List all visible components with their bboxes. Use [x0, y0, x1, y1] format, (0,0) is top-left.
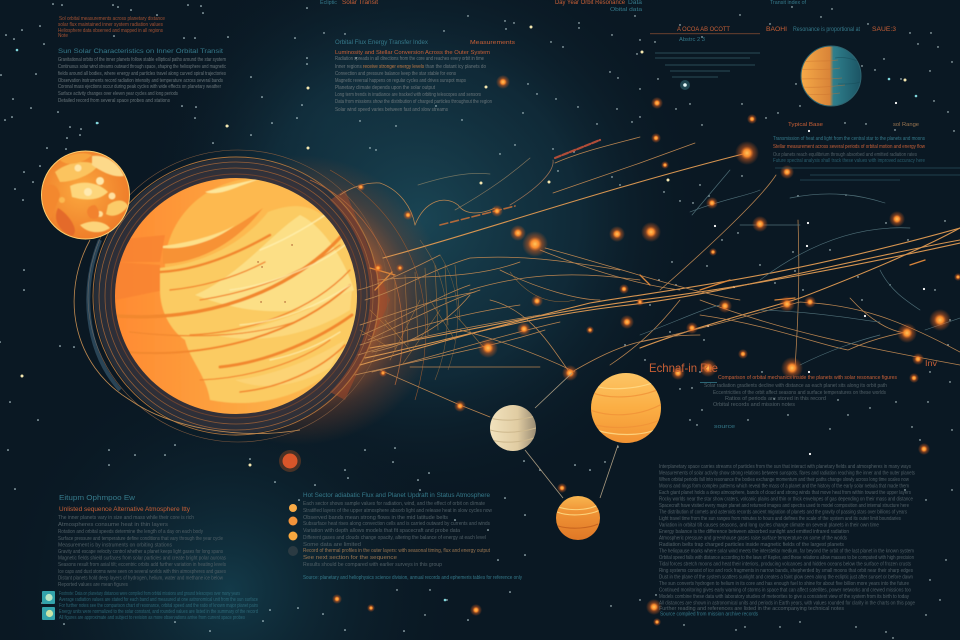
top-left text block: Observation instruments record radiation intensity and temperature across several bands	[58, 78, 223, 84]
bottom-left text block: Ice caps and dust storms were seen on several worlds with thin atmospheres and gases	[58, 569, 226, 575]
long text block bottom right: All distances are shown in astronomical units and periods in Earth years, with values rounded for clarity in the charts on this page	[659, 600, 915, 606]
top-center text block: Convection and pressure balance keep the star stable for eons	[335, 71, 456, 77]
right side text block	[773, 122, 960, 180]
large orange planet lower right	[590, 373, 662, 443]
top-right header and rules: Resonance is proportional at	[793, 26, 860, 33]
right side text block: Stellar measurement across several periods of orbital motion and energy flow	[773, 144, 925, 150]
long text block bottom right	[659, 464, 915, 618]
long text block bottom right: Models combine these data with laboratory studies of meteorites to give a consistent view of the system from its birth to today	[659, 594, 909, 600]
top-center text block: Orbital Flux Energy Transfer Index	[335, 39, 429, 46]
long text block bottom right: Measurements of solar activity show strong relations between sunspots, flares and radiation reaching the inner and the outer planets	[659, 470, 915, 476]
long text block bottom right: Interplanetary space carries streams of particles from the sun that interact with planetary fields and atmospheres in many ways	[659, 464, 911, 470]
teal footnote: All figures are approximate and subject to revision as more observations arrive from current space probes	[59, 615, 245, 621]
middle bottom text block: Observed bands mean strong flows in the mid latitude belts	[303, 515, 448, 521]
top edge labels: Transit index of	[770, 0, 807, 6]
top-left text block: Sun Solar Characteristics on Inner Orbital Transit	[58, 48, 223, 55]
orange star nodes	[332, 75, 960, 626]
top-right header and rules: A OCOA AB OCOTT	[677, 26, 730, 33]
top-right header and rules: Abstrc 2 3	[679, 37, 705, 43]
teal footnote: Average radiation values are stated for each band and measured at one astronomical unit from the sun surface	[59, 597, 258, 603]
top-left text block	[58, 16, 226, 104]
middle-right heading and text: Orbital records and mission notes	[713, 402, 795, 408]
middle bottom text block: Record of thermal profiles in the outer layers: with seasonal timing, flux and energy output	[303, 548, 490, 554]
red small planet	[279, 450, 301, 472]
top-center text block	[335, 39, 516, 113]
right side text block: Transmission of heat and light from the central star to the planets and moons	[773, 136, 925, 142]
top-left text block: Gravitational orbits of the inner planets follow stable elliptical paths around the star system	[58, 57, 226, 63]
middle bottom text block: Results should be compared with earlier surveys in this group	[303, 562, 442, 568]
top-center text block: Data from missions show the distribution of charged particles throughout the region	[335, 99, 492, 105]
right side text block: Typical Base	[788, 122, 823, 128]
top-left text block: Detailed record from several space probes and stations	[58, 98, 170, 104]
big orange planet	[111, 174, 362, 420]
long text block bottom right: Rocky worlds near the star show craters, volcanic plains and thin or thick envelopes of gas depending on their mass and distance	[659, 496, 913, 502]
top edge labels	[320, 0, 807, 13]
filament network	[340, 137, 960, 417]
middle-right heading and text: Inv	[925, 359, 937, 368]
bottom-left text block: Distant planets hold deep layers of hydrogen, helium, water and methane ice below	[58, 576, 223, 582]
long text block bottom right: Tidal forces stretch moons and heat their interiors, producing volcanoes and hidden oceans below the surface of frozen crusts	[659, 562, 911, 568]
middle-right heading and text: Comparison of orbital mechanics inside the planets with solar resonance figures	[718, 375, 897, 381]
top-center text block: Magnetic reversal happens on regular cycles and drives sunspot maps	[335, 78, 466, 84]
bottom-left text block: Gravity and escape velocity control whether a planet keeps light gases for long spans	[58, 549, 223, 555]
connecting lines to planets	[525, 373, 618, 498]
bottom-left text block: Atmospheres consume heat in thin layers	[58, 522, 168, 528]
top-right header and rules	[650, 26, 896, 77]
long text block bottom right: Energy balance is the difference between absorbed sunlight and emitted infrared radiation	[659, 529, 849, 535]
long text block bottom right: Each giant planet holds a deep atmosphere, bands of cloud and strong winds that move heat from within toward the upper layers	[659, 490, 911, 496]
right side text block: Future spectral analysis shall track these values with improved accuracy here	[773, 158, 925, 164]
bottom-left text block: The inner planets vary in size and mass while their core is rich	[58, 515, 194, 521]
long text block bottom right: Atmospheric pressure and greenhouse gases raise surface temperature on some of the worlds	[659, 536, 847, 542]
middle bottom bullets	[288, 504, 298, 556]
middle bottom text block: Different gases and clouds change opacity, altering the balance of energy at each level	[303, 535, 486, 541]
long text block bottom right: Radiation belts trap charged particles inside magnetic fields of the largest planets	[659, 542, 844, 548]
right side text block: sol Range	[893, 122, 919, 128]
small molten sun	[42, 151, 130, 239]
long text block bottom right: Spacecraft have visited every major planet and returned images and spectra used to model composition and internal structure here	[659, 503, 909, 509]
long text block bottom right: Variation in orbital tilt causes seasons, and long cycles change climate on several planets in their own time	[659, 522, 879, 528]
orange planet bottom	[556, 496, 600, 540]
teal footnote	[59, 591, 258, 621]
top-center text block: Luminosity and Stellar Conversion Across the Outer System	[335, 50, 490, 56]
middle bottom text block: Stratified layers of the upper atmosphere absorb light and release heat in slow cycles now	[303, 508, 492, 514]
middle bottom text block: Some data are limited	[303, 542, 361, 548]
top-center text block: Radiation spreads in all directions from the core and reaches every orbit in time	[335, 56, 484, 62]
long text block bottom right: Further reading and references are listed in the accompanying technical notes	[659, 606, 844, 612]
top-center text block: Solar wind speed varies between fast and slow streams	[335, 107, 448, 113]
top-center text block: Inner regions receive stronger energy levels than the distant icy planets do	[335, 64, 486, 70]
long text block bottom right: Orbital speed falls with distance according to the laws of Kepler, and these relations allow masses to be computed with high precision	[659, 555, 914, 561]
long text block bottom right: The distribution of comets and asteroids records ancient migration of planets and the gravity of passing stars over billions of years	[659, 510, 907, 516]
long text block bottom right: When orbital periods fall into resonance the bodies exchange momentum and their paths change slowly across long time scales now	[659, 477, 909, 483]
top-left text block: Sol orbital measurements across planetary distance	[59, 16, 165, 22]
teal footnote: For further notes see the comparison chart of resonance, orbital speed and the ratio of known major planet pairs	[59, 603, 258, 609]
top-left text block: fields around all bodies, where energy and particles travel along curved spiral trajectories	[58, 71, 226, 77]
top-right header and rules: BAOHI	[766, 26, 787, 33]
top-left text block: Heliosphere data observed and mapped in all regions	[58, 28, 163, 34]
top edge labels: Ecliptic	[320, 0, 337, 6]
long text block bottom right: Moons and rings form complex patterns which reveal the mass of a planet and the history of the early solar nebula that made them	[659, 484, 909, 490]
long text block bottom right: Continued monitoring gives early warning of storms in space that can affect satellites, power networks and crewed missions too	[659, 588, 911, 594]
middle-right heading and text: Ratios of periods are stored in this record	[725, 396, 826, 402]
top-center text block: Planetary climate depends upon the solar output	[335, 85, 435, 91]
long text block bottom right: Light travel time from the sun ranges from minutes to hours and defines the scale of the system and its outer limit boundaries	[659, 516, 901, 522]
middle-right heading and text: Echnaf-in Rte	[649, 361, 718, 375]
bottom-left text block: Unlisted sequence Alternative Atmosphere Itty	[59, 506, 191, 513]
long text block bottom right: Ring systems consist of ice and rock fragments in narrow bands, shepherded by small moons that orbit near their sharp edges	[659, 568, 913, 574]
long text block bottom right: Source compiled from mission archive records	[660, 612, 758, 618]
teal icons	[42, 591, 55, 620]
middle bottom text block: Variation with depth allows models that fit spacecraft and probe data	[303, 528, 460, 534]
top-left text block: Note	[58, 33, 68, 39]
bottom-left text block: Surface pressure and temperature define conditions that vary through the year cycle	[58, 536, 223, 542]
bottom-left text block: Seasons result from axial tilt; eccentric orbits add further variation in heating levels	[58, 562, 226, 568]
middle bottom text block: Subsurface heat rises along convection cells and is carried outward by currents and winds	[303, 521, 490, 527]
top-left text block: Surface activity changes over eleven year cycles and long periods	[58, 91, 178, 97]
top-center text block: Measurements	[470, 40, 516, 46]
long text block bottom right: The heliopause marks where solar wind meets the interstellar medium, far beyond the orbit of the last planet in the known system	[659, 548, 914, 554]
teal footnote: Footnote: Data on planetary distances were compiled from orbital missions and ground telescopes over many years	[59, 591, 240, 597]
middle bottom text block	[303, 492, 522, 581]
middle bottom text block: Hot Sector adiabatic Flux and Planet Updraft in Status Atmosphere	[303, 492, 490, 499]
bottom-left text block: Reported values are mean figures	[58, 582, 128, 588]
bottom-left text block: Rotation and orbital speeds determine the length of a day on each body	[58, 529, 203, 535]
top-left text block: solar flux maintained inner system radiation values	[58, 22, 163, 28]
middle bottom text block: Source: planetary and heliophysics science division, annual records and ephemeris tables for reference only	[303, 575, 522, 581]
bottom-left text block: Magnetic fields shield surfaces from solar particles and create bright polar auroras	[58, 556, 226, 562]
middle bottom text block: Each sector shows sample values for radiation, wind, and the effect of orbit on climate	[303, 501, 485, 507]
top edge labels: Obital data	[610, 7, 642, 13]
bottom-left text block	[58, 493, 226, 588]
long text block bottom right: The sun converts hydrogen to helium in its core and has enough fuel to shine for about five billion more years into the future	[659, 581, 909, 587]
top-right header and rules: SAUE:3	[872, 26, 896, 33]
bottom-left text block: Measurement is by instruments on orbiting stations	[58, 542, 172, 548]
long text block bottom right: Dust in the plane of the system scatters sunlight and creates a faint glow seen along the ecliptic just after sunset or before dawn	[659, 574, 913, 580]
top-left text block: Continuous solar wind streams outward through space, shaping the heliosphere and magnetic	[58, 64, 226, 70]
middle-right heading and text: Eccentricities of the orbit affect seasons and surface temperatures on these worlds	[713, 390, 886, 396]
middle bottom text block: See next section for the sequence	[303, 555, 397, 561]
top-left text block: Coronal mass ejections occur during peak cycles with wide effects on planetary weather	[58, 84, 221, 90]
cream planet	[490, 405, 536, 451]
rings around the big planet	[74, 150, 458, 445]
middle-right heading and text: source	[714, 424, 735, 430]
middle-right heading and text	[649, 359, 937, 430]
right side text block: Our planets reach equilibrium through absorbed and emitted radiation rates	[773, 152, 917, 158]
teal and orange planet	[800, 46, 861, 106]
top-center text block: Long term trends in irradiance are tracked with orbiting telescopes and sensors	[335, 92, 481, 98]
bright teal star	[680, 80, 690, 90]
teal footnote: Energy units were normalized to the solar constant, and rounded values are listed in the summary of the record	[59, 609, 258, 615]
middle-right heading and text: Solar radiation gradients decline with distance as each planet sits along its orbit path	[704, 383, 887, 389]
bottom-left text block: Eitupm Ophmpoo Ew	[59, 493, 136, 502]
